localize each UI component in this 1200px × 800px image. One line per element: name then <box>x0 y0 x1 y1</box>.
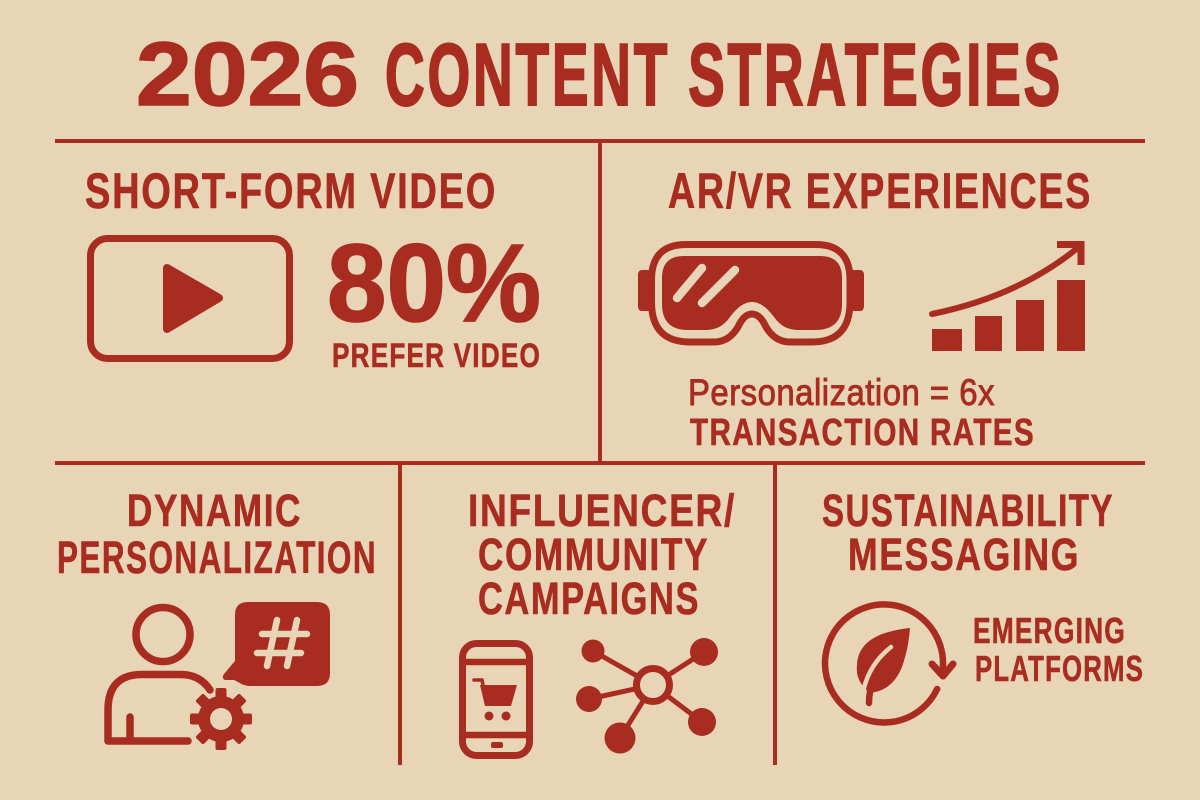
heading: dynamic personalization: PERSONALIZATION <box>57 532 377 583</box>
text: personalization stat: Personalization = 6x <box>688 372 995 413</box>
text: emerging platforms: EMERGING <box>973 610 1126 651</box>
icon: leaf in circular arrow <box>825 604 953 722</box>
panel: influencer and community campaigns <box>462 485 736 756</box>
panel: short-form video <box>85 163 541 375</box>
stat label: PREFER VIDEO <box>332 337 541 375</box>
icon: video player <box>90 238 290 358</box>
icon: VR goggles <box>639 244 863 342</box>
title <box>136 25 1063 125</box>
heading: influencer/community campaigns <box>468 485 736 624</box>
heading: influencer/community campaigns: INFLUENCER/ <box>468 485 736 536</box>
icon: rising bar chart <box>932 244 1085 351</box>
heading: dynamic personalization <box>57 485 377 583</box>
heading: sustainability messaging <box>822 485 1114 580</box>
text: emerging platforms <box>973 610 1144 689</box>
stat: 80%: 80% <box>327 222 541 345</box>
heading: short-form video: SHORT-FORM VIDEO <box>85 163 497 219</box>
panel: dynamic personalization <box>57 485 377 750</box>
icon: hashtag speech bubble <box>223 602 330 686</box>
icon: user with gear <box>108 608 252 750</box>
heading: dynamic personalization: DYNAMIC <box>127 485 302 536</box>
title: 2026 <box>136 25 359 125</box>
panel: AR/VR experiences <box>639 163 1092 454</box>
text: transaction rates: TRANSACTION RATES <box>690 412 1035 454</box>
icon: phone with shopping cart <box>462 644 530 756</box>
panel: sustainability messaging <box>822 485 1144 722</box>
heading: influencer/community campaigns: COMMUNITY <box>478 529 709 580</box>
icon: network nodes <box>576 638 718 754</box>
heading: influencer/community campaigns: CAMPAIGNS <box>478 573 700 624</box>
heading: sustainability messaging: MESSAGING <box>848 529 1080 580</box>
